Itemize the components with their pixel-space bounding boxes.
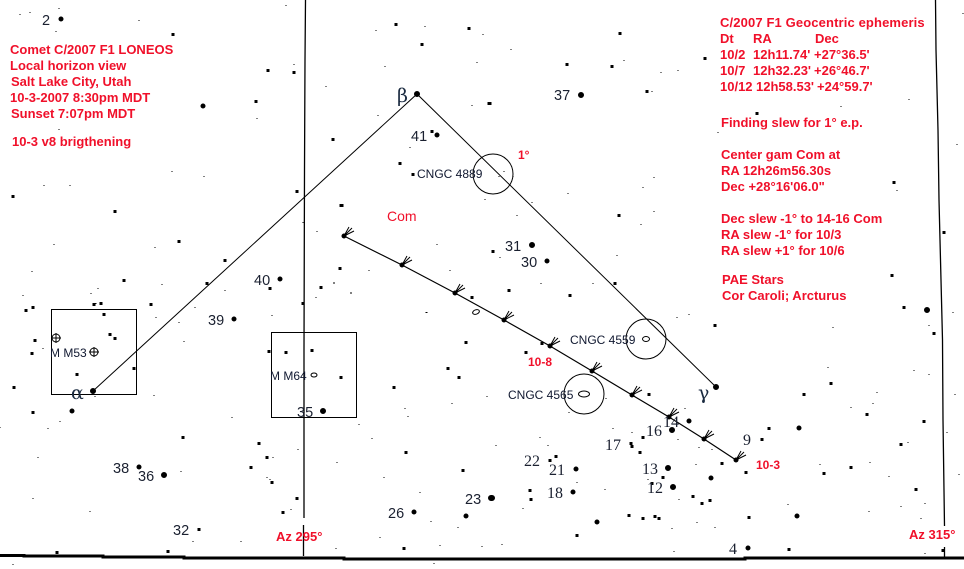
- title block: 10-3-2007 8:30pm MDT: [10, 90, 150, 105]
- ephemeris block: 12h32.23': [753, 63, 811, 78]
- star number labels: 40: [254, 273, 270, 289]
- ephemeris block: C/2007 F1 Geocentric ephemeris: [720, 15, 925, 30]
- star number labels: 37: [554, 88, 570, 104]
- object labels: CNGC 4559: [570, 333, 636, 347]
- field circles: [473, 154, 666, 414]
- star number labels: 9: [743, 432, 751, 449]
- ephemeris block: RA: [753, 31, 772, 46]
- ephemeris block: 12h11.74': [753, 47, 810, 62]
- ephemeris block: 10/7: [720, 63, 745, 78]
- galaxy symbols: [311, 309, 650, 397]
- greek star labels: β: [397, 85, 408, 107]
- finding slew instructions: Center gam Com at: [721, 147, 841, 162]
- title block: Sunset 7:07pm MDT: [11, 106, 135, 121]
- title block: Comet C/2007 F1 LONEOS: [10, 42, 174, 57]
- title block: 10-3 v8 brigthening: [12, 134, 131, 149]
- star number labels: 17: [605, 437, 621, 454]
- star number labels: 14: [663, 414, 679, 431]
- globular cluster symbols: [51, 333, 99, 357]
- object labels: CNGC 4565: [508, 388, 574, 402]
- finding slew instructions: Dec +28°16'06.0": [721, 179, 825, 194]
- star number labels: 21: [549, 462, 565, 479]
- ephemeris block: Dec: [815, 31, 839, 46]
- star number labels: 30: [521, 255, 537, 271]
- star number labels: 26: [388, 506, 404, 522]
- finding slew instructions: RA slew +1° for 10/6: [721, 243, 845, 258]
- greek star labels: γ: [698, 382, 709, 404]
- finding slew instructions: [721, 115, 882, 258]
- star number labels: 22: [524, 453, 540, 470]
- PAE stars note: [722, 272, 846, 303]
- object labels: M M53: [50, 346, 87, 360]
- star number labels: 38: [113, 461, 129, 477]
- ephemeris block: Dt: [720, 31, 734, 46]
- star number labels: 2: [42, 13, 50, 29]
- red chart labels: Com: [387, 208, 417, 224]
- red chart labels: 10-8: [528, 355, 552, 369]
- ephemeris block: +27°36.5': [814, 47, 870, 62]
- star number labels: 4: [729, 541, 737, 558]
- ephemeris block: +26°46.7': [814, 63, 870, 78]
- M64 box: [272, 332, 356, 418]
- constellation lines: [93, 94, 716, 391]
- star number labels: 31: [505, 239, 521, 255]
- title block: Local horizon view: [10, 58, 127, 73]
- red chart labels: Az 315°: [909, 527, 955, 542]
- star number labels: 13: [642, 461, 658, 478]
- star number labels: 18: [547, 485, 563, 502]
- star number labels: 12: [647, 480, 663, 497]
- azimuth line 315: [936, 0, 944, 558]
- ephemeris block: +24°59.7': [817, 79, 873, 94]
- ephemeris block: 10/12: [720, 79, 753, 94]
- red chart labels: [276, 148, 955, 544]
- title block: Salt Lake City, Utah: [11, 74, 131, 89]
- star number labels: 39: [208, 313, 224, 329]
- horizon line: [0, 556, 964, 559]
- red chart labels: Az 295°: [276, 529, 322, 544]
- star number labels: 23: [465, 492, 481, 508]
- star number labels: 35: [297, 405, 313, 421]
- finding slew instructions: Dec slew -1° to 14-16 Com: [721, 211, 882, 226]
- greek star labels: [71, 85, 709, 404]
- M53 box: [52, 310, 136, 394]
- object labels: M M64: [270, 369, 307, 383]
- star number labels: 32: [173, 523, 189, 539]
- comet track: [344, 236, 736, 460]
- ephemeris block: 12h58.53': [756, 79, 814, 94]
- ephemeris block: 10/2: [720, 47, 745, 62]
- object labels: CNGC 4889: [417, 167, 483, 181]
- star number labels: 16: [646, 423, 662, 440]
- title block: [10, 42, 174, 149]
- red chart labels: 10-3: [756, 458, 780, 472]
- azimuth line 295: [304, 0, 306, 556]
- red chart labels: 1°: [518, 148, 530, 162]
- comet position markers: [344, 227, 746, 460]
- finding slew instructions: RA slew -1° for 10/3: [721, 227, 841, 242]
- greek star labels: α: [71, 382, 84, 404]
- star number labels: [42, 13, 751, 558]
- object labels: [50, 167, 636, 402]
- finding slew instructions: Finding slew for 1° e.p.: [721, 115, 863, 130]
- ephemeris block: [720, 15, 925, 94]
- star number labels: 41: [411, 129, 427, 145]
- star number labels: 36: [138, 469, 154, 485]
- finding slew instructions: RA 12h26m56.30s: [721, 163, 831, 178]
- PAE stars note: PAE Stars: [722, 272, 784, 287]
- PAE stars note: Cor Caroli; Arcturus: [722, 288, 846, 303]
